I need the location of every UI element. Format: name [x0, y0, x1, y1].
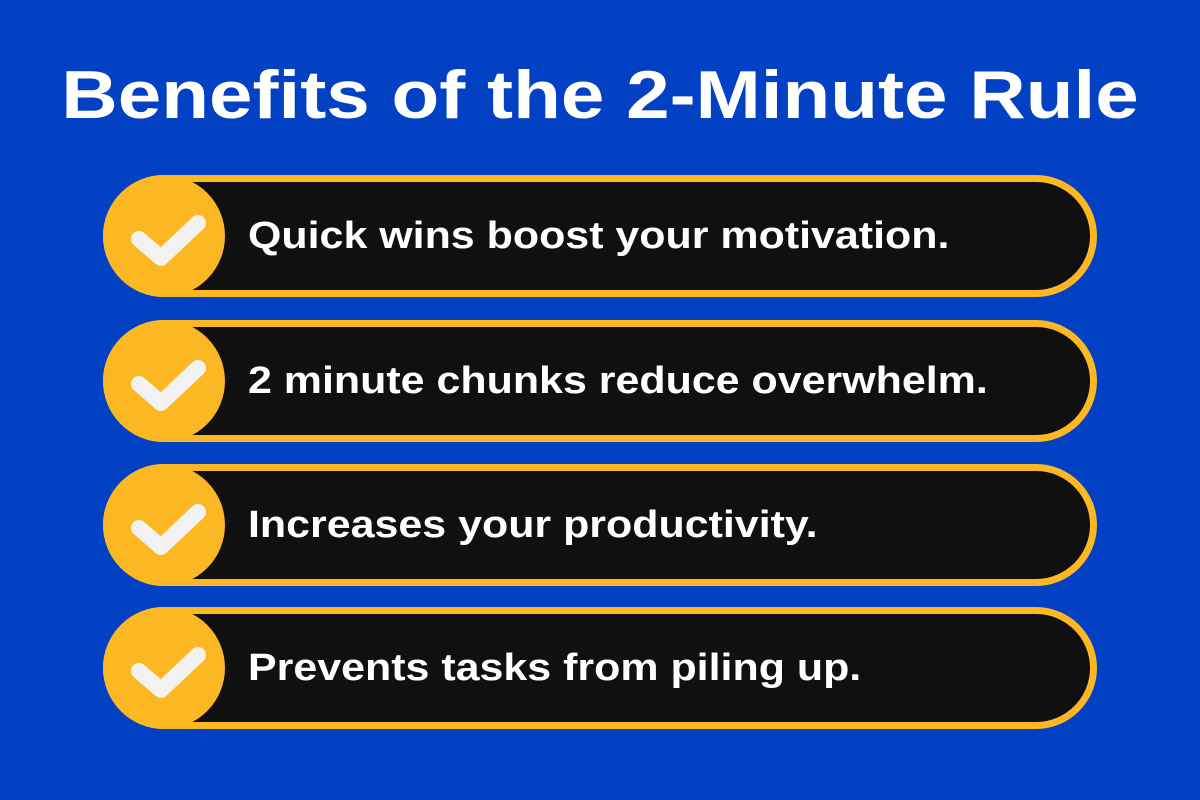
text: Increases your productivity. — [248, 504, 818, 546]
text: Prevents tasks from piling up. — [248, 647, 861, 689]
icon: check circle — [103, 464, 225, 586]
icon: check circle — [103, 607, 225, 729]
row 4 — [103, 607, 1097, 729]
text: Quick wins boost your motivation. — [248, 215, 949, 257]
icon: check circle — [103, 175, 225, 297]
text: 2 minute chunks reduce overwhelm. — [248, 360, 988, 402]
row 2 — [103, 320, 1097, 442]
title: Benefits of the 2-Minute Rule — [61, 57, 1139, 133]
row 3 — [103, 464, 1097, 586]
icon: check circle — [103, 320, 225, 442]
row 1 — [103, 175, 1097, 297]
